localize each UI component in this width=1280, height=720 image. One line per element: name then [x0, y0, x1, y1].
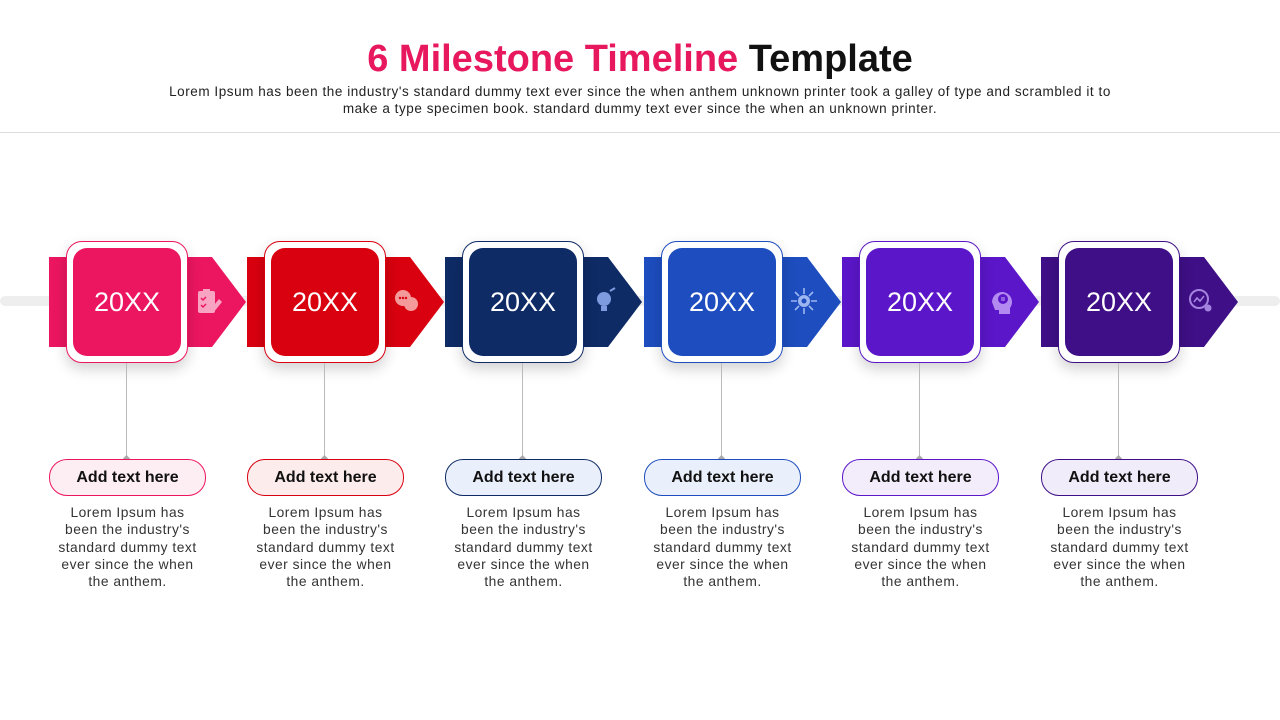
- text 6: Lorem Ipsum has: [1062, 505, 1177, 520]
- milestone 2: [247, 241, 444, 589]
- year box 5: [859, 241, 981, 363]
- text 3: standard dummy text: [454, 540, 593, 555]
- milestone 5: [842, 241, 1039, 589]
- text 2: [256, 505, 395, 589]
- text 3: been the industry's: [461, 522, 586, 537]
- text 6: been the industry's: [1057, 522, 1182, 537]
- text 4: been the industry's: [660, 522, 785, 537]
- text 2: been the industry's: [263, 522, 388, 537]
- label pill 3: [445, 459, 602, 496]
- text 1: Lorem Ipsum has: [70, 505, 185, 520]
- text 6: the anthem.: [1080, 574, 1159, 589]
- icon: analytics search: [1189, 289, 1212, 312]
- title: 6 Milestone Timeline Template: [367, 38, 913, 80]
- text 1: the anthem.: [88, 574, 167, 589]
- milestone 4: [644, 241, 841, 589]
- year box 3: [462, 241, 584, 363]
- text 2: standard dummy text: [256, 540, 395, 555]
- year box 6: 20XX: [1086, 286, 1152, 316]
- label pill 2: Add text here: [274, 468, 377, 486]
- label pill 6: [1041, 459, 1198, 496]
- label pill 5: [842, 459, 999, 496]
- milestone 1: [49, 241, 246, 589]
- text 3: ever since the when: [457, 557, 590, 572]
- milestone 6: [1041, 241, 1238, 589]
- text 4: the anthem.: [683, 574, 762, 589]
- label pill 3: Add text here: [472, 468, 575, 486]
- label pill 1: Add text here: [76, 468, 179, 486]
- text 3: the anthem.: [484, 574, 563, 589]
- subtitle: make a type specimen book. standard dummy text ever since the when an unknown printer.: [343, 101, 937, 116]
- label pill 6: Add text here: [1068, 468, 1171, 486]
- year box 3: 20XX: [490, 286, 556, 316]
- text 6: [1050, 505, 1189, 589]
- text 4: Lorem Ipsum has: [665, 505, 780, 520]
- text 5: the anthem.: [881, 574, 960, 589]
- text 3: [454, 505, 593, 589]
- year box 1: [66, 241, 188, 363]
- text 5: been the industry's: [858, 522, 983, 537]
- label pill 5: Add text here: [869, 468, 972, 486]
- text 2: the anthem.: [286, 574, 365, 589]
- year box 4: [661, 241, 783, 363]
- text 4: ever since the when: [656, 557, 789, 572]
- text 4: [653, 505, 792, 589]
- text 6: ever since the when: [1053, 557, 1186, 572]
- text 6: standard dummy text: [1050, 540, 1189, 555]
- text 1: standard dummy text: [58, 540, 197, 555]
- label pill 4: Add text here: [671, 468, 774, 486]
- text 1: [58, 505, 197, 589]
- label pill 4: [644, 459, 801, 496]
- milestone 3: [445, 241, 642, 589]
- icon: lightbulb: [597, 287, 616, 311]
- icon: gear network: [791, 288, 817, 314]
- text 5: Lorem Ipsum has: [863, 505, 978, 520]
- text 5: [851, 505, 990, 589]
- icon: head gear: [992, 292, 1012, 314]
- text 5: standard dummy text: [851, 540, 990, 555]
- icon: checklist: [198, 289, 222, 313]
- text 4: standard dummy text: [653, 540, 792, 555]
- subtitle: [169, 84, 1111, 116]
- text 2: Lorem Ipsum has: [268, 505, 383, 520]
- icon: chat: [395, 290, 418, 311]
- year box 6: [1058, 241, 1180, 363]
- year box 5: 20XX: [887, 286, 953, 316]
- text 2: ever since the when: [259, 557, 392, 572]
- label pill 1: [49, 459, 206, 496]
- timeline track: [0, 296, 1280, 306]
- year box 1: 20XX: [94, 286, 160, 316]
- text 3: Lorem Ipsum has: [466, 505, 581, 520]
- label pill 2: [247, 459, 404, 496]
- year box 2: [264, 241, 386, 363]
- year box 2: 20XX: [292, 286, 358, 316]
- subtitle: Lorem Ipsum has been the industry's standard dummy text ever since the when anthem unknown printer took a galley of type and scrambled it to: [169, 84, 1111, 99]
- text 1: been the industry's: [65, 522, 190, 537]
- text 1: ever since the when: [61, 557, 194, 572]
- year box 4: 20XX: [689, 286, 755, 316]
- text 5: ever since the when: [854, 557, 987, 572]
